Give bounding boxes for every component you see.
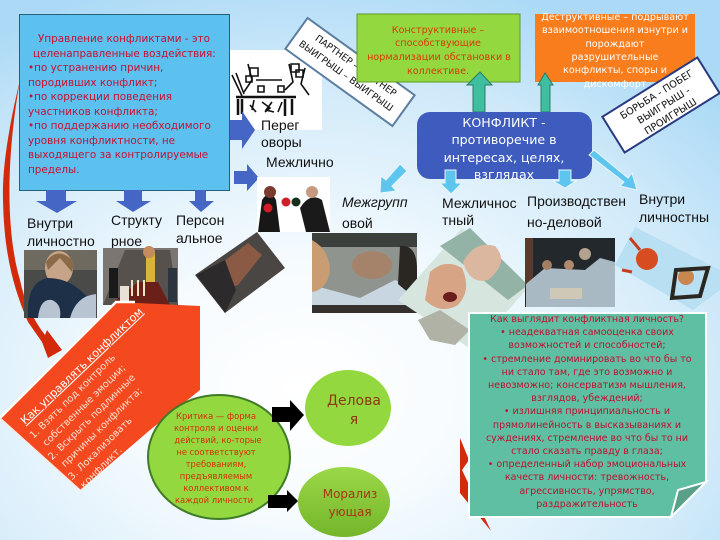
struggle win-lose box: БОРЬБА - ПОБЕГ — [619, 68, 696, 122]
constructive box: нормализации обстановки в — [367, 52, 511, 63]
red lightning arrow — [460, 438, 491, 531]
type labels: left — [27, 212, 224, 249]
sticky note: conflict personality: качеств личности: тревожность, — [505, 472, 669, 483]
steps: 2. Вскрыть подлинные — [46, 372, 138, 463]
type labels: left: Внутри — [27, 215, 73, 231]
central conflict box: КОНФЛИКТ - — [462, 115, 546, 130]
sticky note: conflict personality: прямолинейность в высказываниях и — [493, 420, 681, 431]
circle: criticism definition: действий, ко-торые — [174, 435, 262, 445]
type labels: right — [342, 191, 709, 231]
destructive box: разрушительные — [572, 52, 659, 63]
definition text: •по устранению причин, — [28, 62, 163, 74]
definition text: Управление конфликтами - это — [38, 33, 210, 45]
photo: distressed girl — [24, 250, 97, 318]
definition text: выходящего за контролируемые — [28, 149, 208, 161]
central conflict box: противоречие в — [451, 132, 557, 147]
type labels: right: Межгрупп — [342, 194, 408, 210]
steps: 3. Локализовать — [66, 415, 135, 483]
steps: 1. Взять под контроль — [28, 352, 118, 441]
black arrows — [268, 400, 304, 512]
circle: criticism definition: требованиям, — [186, 459, 246, 469]
type labels: left: рное — [111, 233, 142, 249]
type labels: left: Структу — [111, 212, 162, 228]
sticky note: conflict personality: • стремление доминировать во что бы то — [482, 354, 692, 365]
type labels: right: тный — [442, 212, 474, 228]
destructive box: порождают — [586, 39, 645, 50]
steps — [28, 352, 145, 491]
photo: shouting men — [398, 228, 528, 350]
heading: Как управлять конфликтом — [18, 305, 146, 427]
destructive box: Деструктивные – подрывают — [541, 12, 689, 23]
cartoon: negotiators at table — [230, 50, 322, 130]
central conflict box — [417, 112, 592, 182]
definition text: уровня конфликтности, не — [28, 135, 175, 147]
sticky note: conflict personality: возможностей и способностей; — [508, 340, 666, 351]
labels: negotiation and interpersonal: Перег — [261, 117, 300, 133]
definition text — [28, 33, 216, 176]
central conflict box: взглядах — [474, 167, 535, 182]
definition text: пределы. — [28, 164, 80, 176]
circle: criticism definition — [148, 395, 290, 519]
circle: criticism definition: не соответствуют — [176, 447, 256, 457]
photo: handshake — [195, 232, 285, 313]
circle: criticism definition: предъявляемым — [180, 471, 252, 481]
arrows: from definition panel — [36, 111, 259, 213]
type labels: left: Персон — [176, 212, 224, 228]
destructive box: конфликты, споры и — [563, 65, 667, 76]
circle: criticism definition: коллективом к — [183, 483, 249, 493]
steps: конфликт. — [78, 445, 125, 491]
type labels: right: Внутри — [639, 191, 685, 207]
circle: business criticism: Делова — [327, 393, 381, 409]
sticky note: conflict personality: агрессивность, упрямство, — [519, 486, 655, 497]
struggle win-lose box: ВЫИГРЫШ - — [636, 85, 693, 127]
sticky note: conflict personality: суждениях, стремление во что бы то ни — [486, 433, 688, 444]
type labels: right: Производствен — [527, 193, 626, 209]
destructive box: дискомфорт — [584, 79, 647, 90]
struggle win-lose box — [602, 58, 720, 152]
labels: negotiation and interpersonal: стное — [266, 172, 303, 188]
circle: moralizing criticism: Морализ — [323, 487, 377, 501]
sticky note: conflict personality: раздражительность — [536, 499, 638, 510]
destructive box — [535, 12, 695, 90]
circle: business criticism: я — [350, 412, 358, 428]
partner win-win box: ПАРТНЕР – ПАРТНЕР — [313, 33, 399, 99]
photo: production meeting — [525, 238, 615, 307]
definition text: участников конфликта; — [28, 106, 158, 118]
type labels: right: овой — [342, 215, 373, 231]
partner win-win box — [285, 18, 415, 126]
photo: boxers — [257, 177, 330, 232]
arrows: conflict types — [380, 150, 637, 194]
type labels: right: Межличнос — [442, 195, 517, 211]
sticky note: conflict personality: взглядов, убеждений; — [531, 393, 643, 404]
sticky note: conflict personality: • неадекватная самооценка своих — [500, 327, 674, 338]
circle: moralizing criticism — [298, 467, 390, 537]
arrows: up to constructive and destructive — [467, 72, 553, 112]
type labels: right: личностны — [639, 209, 709, 225]
circle: criticism definition: Критика — форма — [176, 411, 256, 421]
constructive box: Конструктивные – — [392, 25, 484, 36]
definition text: •по поддержанию необходимого — [28, 120, 211, 132]
sticky note: conflict personality: • определенный набор эмоциональных — [488, 459, 687, 470]
type labels: right: но-деловой — [527, 214, 602, 230]
circle: criticism definition: контроля и оценки — [174, 423, 258, 433]
sticky note: conflict personality: стало сказать правду в глаза; — [511, 446, 663, 457]
central conflict box: интересах, целях, — [444, 150, 564, 165]
sticky note: conflict personality: невозможно; консерватизм мышления, — [488, 380, 686, 391]
sticky note: conflict personality — [469, 313, 706, 517]
circle: criticism definition: каждой личности — [175, 495, 253, 505]
sticky note: conflict personality: Как выглядит конфликтная личность? — [490, 314, 684, 325]
sticky note: conflict personality: ни стало там, где это возможно и — [502, 367, 672, 378]
sticky note: conflict personality: • излишняя принципиальность и — [504, 406, 670, 417]
circle: business criticism — [305, 370, 391, 446]
photo: structural conflict group — [103, 246, 178, 305]
labels: negotiation and interpersonal: Межлично — [266, 154, 334, 170]
type labels: left: личностно — [27, 233, 95, 249]
partner win-win box: ВЫИГРЫШ – ВЫИГРЫШ — [296, 39, 395, 114]
constructive box: способствующие — [395, 38, 481, 49]
constructive box: коллективе. — [407, 66, 469, 77]
definition text: породивших конфликт; — [28, 77, 157, 89]
definition text: целенаправленные воздействия: — [33, 48, 216, 60]
labels: negotiation and interpersonal: оворы — [261, 134, 302, 150]
struggle win-lose box: ПРОИГРЫШ — [643, 97, 699, 137]
photo: intergroup argument — [312, 233, 417, 313]
steps: причины конфликта; — [59, 386, 145, 470]
destructive box: взаимоотношения изнутри и — [542, 25, 688, 36]
steps: собственные эмоции; — [41, 363, 128, 449]
definition text: •по коррекции поведения — [28, 91, 172, 103]
type labels: left: альное — [176, 230, 223, 246]
photo: red and brown monsters — [615, 227, 720, 310]
circle: moralizing criticism: ующая — [328, 505, 372, 519]
panel: how to manage conflict — [0, 302, 200, 491]
panel: definition of conflict management — [20, 14, 230, 190]
constructive box — [357, 14, 520, 82]
red swoosh arrow — [3, 80, 62, 358]
labels: negotiation and interpersonal — [261, 117, 334, 188]
